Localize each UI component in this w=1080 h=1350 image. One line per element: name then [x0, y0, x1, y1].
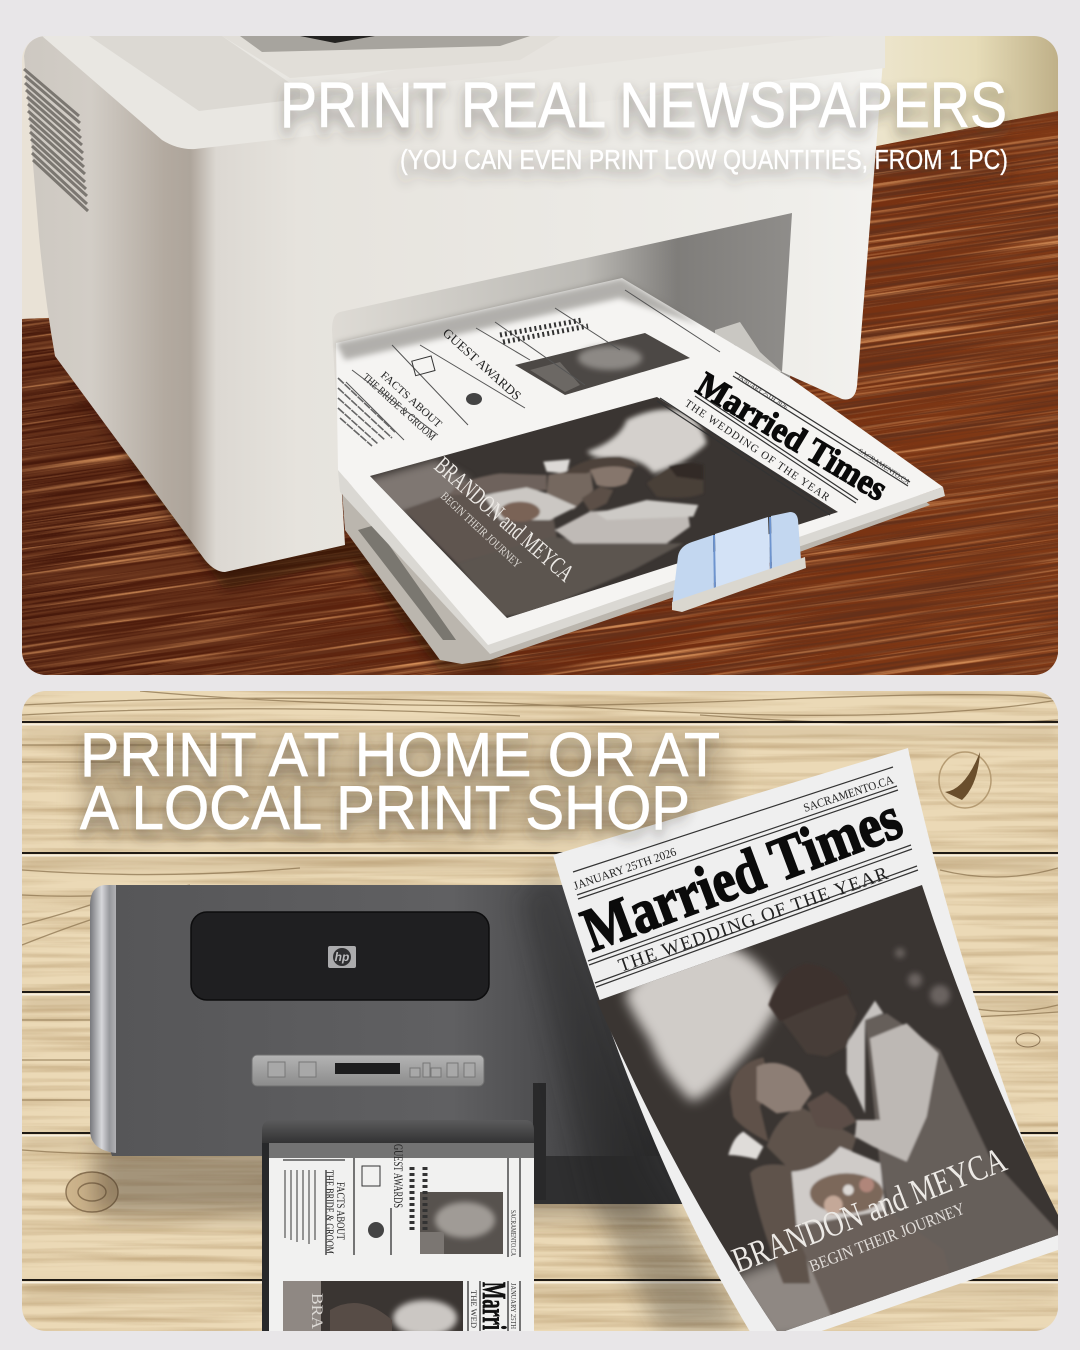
printer cast shadow — [95, 1145, 655, 1215]
blurred ground — [730, 1258, 850, 1340]
small photo on inner page — [420, 1192, 503, 1254]
names on paper photo: BRA — [308, 1293, 325, 1329]
bride hair — [563, 457, 637, 473]
journey caption: BEGIN THEIR JOURNEY — [807, 1199, 967, 1276]
blurred ground — [367, 460, 470, 520]
icon: bouquet — [368, 1222, 384, 1238]
inner rules — [283, 1158, 520, 1331]
bouquet — [500, 502, 540, 522]
masthead rules — [657, 372, 910, 515]
city: SACRAMENTO.CA — [802, 772, 896, 815]
hp badge: hp — [335, 950, 349, 964]
inkjet printer — [90, 885, 690, 1204]
control strip — [252, 1055, 484, 1086]
paper coming out of printer — [262, 1143, 534, 1336]
wood planks — [22, 691, 1067, 1331]
dress — [792, 1147, 887, 1237]
rear lid — [89, 36, 300, 111]
city: SACRAMENTO.CA — [857, 447, 912, 486]
body text lines — [338, 378, 395, 446]
collar — [847, 1001, 883, 1113]
black lid panel — [191, 912, 489, 1000]
panel: laser printer on red wood floor — [22, 36, 1058, 675]
tagline: THE WEDDING OF THE YEAR — [616, 863, 891, 977]
output tray — [222, 36, 560, 78]
blurred cloud — [625, 940, 782, 1100]
printer body — [92, 885, 680, 1156]
bride arm — [750, 1164, 810, 1283]
newspaper sheet — [336, 278, 943, 645]
dress — [483, 487, 577, 520]
groom vest and trousers — [865, 1013, 1060, 1333]
date on paper: JANUARY 25TH — [509, 1283, 517, 1329]
knot right plank — [1016, 1033, 1040, 1047]
sub caption: BEGIN THEIR JOURNEY — [438, 489, 524, 571]
bride face — [757, 1063, 812, 1113]
skirt — [403, 493, 557, 563]
masthead rules — [573, 767, 918, 987]
icon: invitation envelope — [412, 356, 435, 376]
groom hair — [768, 963, 850, 1022]
slot shadow on paper — [269, 1143, 534, 1158]
knot lower left — [66, 1172, 118, 1212]
knot upper right — [939, 752, 991, 808]
tagline on paper: THE WED — [469, 1290, 478, 1328]
output slot hood — [262, 1120, 534, 1145]
printer shadow on floor — [55, 360, 500, 670]
groom face — [782, 993, 857, 1057]
wall — [22, 36, 1058, 336]
plank grain — [22, 691, 1067, 1154]
bride hair — [730, 1057, 770, 1142]
slot paper guide — [715, 322, 782, 372]
arm — [450, 473, 547, 495]
bokeh — [895, 948, 950, 1005]
guest award icons — [412, 1167, 425, 1232]
headline line 2: A LOCAL PRINT SHOP — [80, 774, 690, 843]
city on paper: SACRAMENTO.CA — [509, 1210, 517, 1256]
lower skirt — [793, 1210, 967, 1337]
paper tray — [342, 494, 930, 664]
ventilation grille — [24, 69, 88, 211]
groom collar — [597, 500, 698, 520]
printer top band — [42, 36, 885, 149]
hp badge — [328, 946, 356, 968]
blurred cloud — [587, 409, 707, 473]
masthead title: Married Times — [690, 364, 894, 509]
printer body — [24, 30, 885, 572]
groom legs — [457, 537, 683, 617]
inner heading: guest awards: GUEST AWARDS — [391, 1144, 406, 1208]
headline line 1: PRINT AT HOME OR AT — [80, 721, 720, 790]
masthead tagline: THE WEDDING OF THE YEAR — [682, 398, 832, 504]
couple names: BRANDON and MEYCA — [429, 452, 579, 587]
wooden floor — [22, 111, 1058, 675]
inner page photo — [515, 333, 690, 395]
inner heading: the bride and groom: THE BRIDE & GROOM — [323, 1170, 337, 1254]
icon: bouquet — [466, 393, 482, 405]
masthead title: Married Times — [573, 784, 911, 965]
sleeve — [855, 1023, 938, 1162]
panel: desktop printer on light wood planks — [22, 691, 1067, 1340]
front page photo — [370, 397, 838, 618]
bouquet — [810, 1173, 883, 1214]
bride neck and chest — [767, 1107, 857, 1173]
front photo on paper — [283, 1281, 463, 1336]
flyer photo — [590, 880, 1060, 1340]
bride chest — [547, 467, 593, 510]
veil — [543, 459, 570, 473]
inner heading: guest awards: GUEST AWARDS — [440, 325, 524, 403]
text lines — [285, 1170, 315, 1244]
inner page rules and text lines — [346, 290, 720, 440]
groom hand — [807, 1092, 857, 1130]
groom hand — [582, 487, 613, 512]
stack edge — [338, 470, 945, 654]
bride face — [590, 466, 633, 487]
inner heading: facts: THE BRIDE & GROOM — [360, 371, 438, 443]
groom shirt sleeve — [555, 505, 690, 543]
groom head — [647, 464, 703, 498]
date: JANUARY 25TH 2026 — [736, 373, 789, 412]
groom hair — [668, 463, 703, 480]
flyer shadow — [520, 870, 745, 1331]
printer shell — [24, 36, 885, 572]
printer rear base — [500, 1080, 690, 1204]
curled newspaper front page — [553, 748, 1060, 1340]
chrome end cap — [90, 885, 116, 1153]
blue paper guide — [672, 512, 806, 612]
award icon rows — [500, 320, 588, 342]
inner heading: facts: FACTS ABOUT — [378, 369, 444, 431]
title shading — [80, 740, 730, 835]
icon: envelope — [362, 1166, 380, 1186]
right paper guide post — [533, 1083, 546, 1200]
paper slot — [330, 205, 800, 480]
inner heading: facts about: FACTS ABOUT — [334, 1182, 348, 1240]
veil — [728, 1132, 763, 1159]
shadow under printer slot — [336, 278, 700, 360]
front lid line — [300, 30, 885, 99]
date: JANUARY 25TH 2026 — [571, 844, 678, 893]
